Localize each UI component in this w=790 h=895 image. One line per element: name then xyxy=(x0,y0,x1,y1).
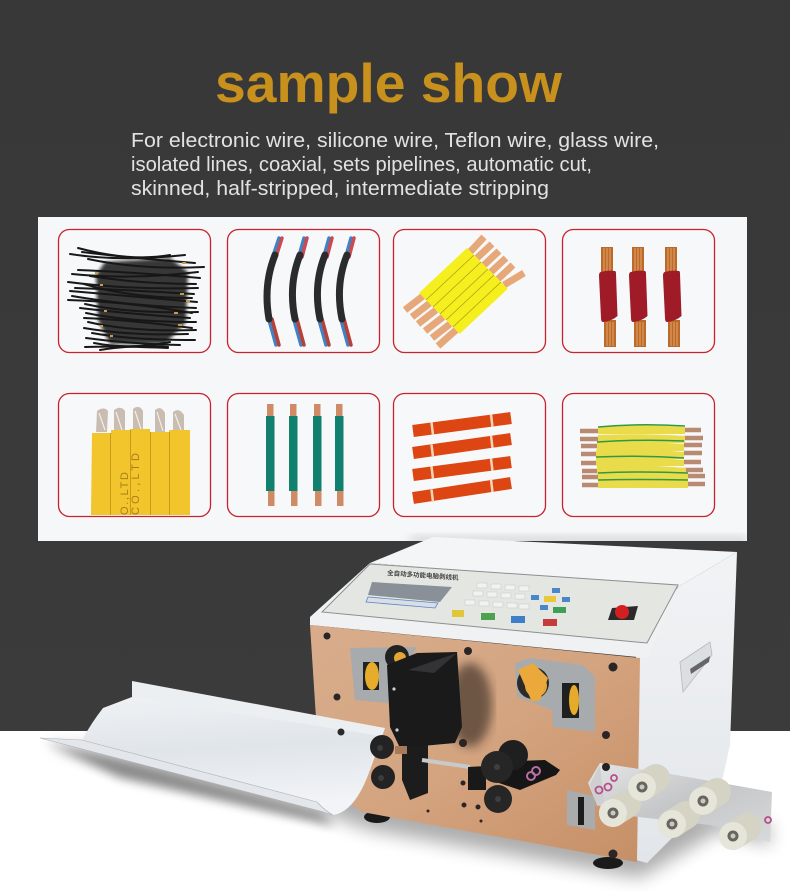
card: yellow-green earth wires xyxy=(562,394,714,516)
machine shadow xyxy=(44,535,770,878)
left feed rollers xyxy=(370,735,395,789)
title: sample show xyxy=(215,52,562,114)
machine right side panel xyxy=(636,552,737,863)
right guide bracket and metal plate xyxy=(588,763,772,842)
steel rod xyxy=(422,760,470,767)
machine feet xyxy=(364,811,623,869)
card: green wires xyxy=(228,394,380,516)
white ceramic rollers xyxy=(599,773,747,850)
description text: skinned, half-stripped, intermediate stripping xyxy=(131,178,549,200)
description text: isolated lines, coaxial, sets pipelines, automatic cut, xyxy=(131,154,592,176)
colored function buttons xyxy=(452,588,570,626)
description text xyxy=(131,130,659,200)
control panel: 全自动多功能电脑剥线机 xyxy=(387,568,459,582)
small scale plate xyxy=(567,790,595,830)
machine sloped face and front strip xyxy=(310,563,678,658)
card: red wires with copper ends xyxy=(562,230,714,352)
background: white lower section xyxy=(0,731,790,895)
keypad xyxy=(465,583,529,609)
side handle xyxy=(680,642,712,692)
card: yellow thick wires xyxy=(58,394,210,516)
copper front plate xyxy=(310,625,640,862)
right gray adjustment plate with yellow knob xyxy=(515,658,595,732)
machine: wire cutting and stripping machine xyxy=(40,535,772,878)
card: yellow thick wires: O.,LTD xyxy=(119,472,131,515)
card: black sheathed two-core wires xyxy=(228,230,380,352)
wire guide post xyxy=(395,745,428,800)
right feed roller assembly xyxy=(468,740,560,813)
card: yellow wires on diagonal xyxy=(394,230,546,352)
head shadow xyxy=(448,663,492,747)
output tray xyxy=(40,681,385,815)
panel screws and holes xyxy=(324,632,618,858)
left gray adjustment plate xyxy=(350,645,417,703)
card: yellow thick wires: CO.,LTD xyxy=(130,453,142,515)
machine top lid xyxy=(370,537,737,587)
card: black electronic wires xyxy=(58,230,210,352)
black blade head xyxy=(387,652,462,748)
power switch xyxy=(608,605,638,620)
card: orange wires xyxy=(394,394,546,516)
panel: wire samples xyxy=(38,217,747,541)
description text: For electronic wire, silicone wire, Teflon wire, glass wire, xyxy=(131,130,659,152)
control panel xyxy=(322,564,678,643)
display screen xyxy=(368,582,452,602)
